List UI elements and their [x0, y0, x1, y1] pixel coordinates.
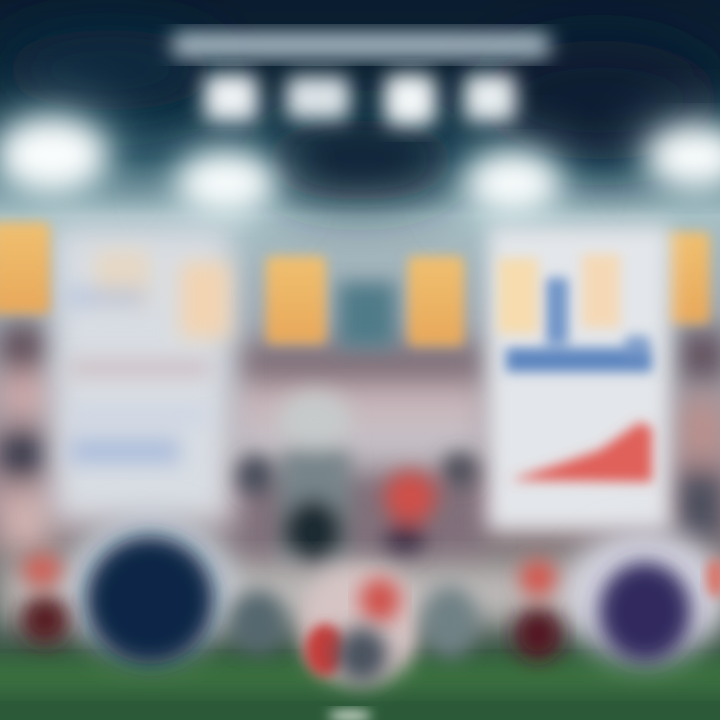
helmet: grey left: [230, 590, 286, 654]
crowd band: [0, 325, 720, 560]
helmet: red and grey centre: [298, 565, 422, 685]
left panel chart: [70, 410, 210, 464]
yard marker: [328, 710, 372, 720]
centre crowd figures: [237, 392, 478, 566]
right panel bars: [498, 254, 652, 372]
helmet: grey right: [422, 586, 478, 658]
helmet: maroon right: [514, 560, 562, 660]
center teal panel: [338, 282, 396, 348]
left panel: [52, 226, 232, 522]
orange blocks: [0, 222, 710, 346]
title icons row: [204, 74, 516, 126]
helmet: navy: [66, 513, 234, 664]
stadium lights: [0, 105, 720, 223]
field: [0, 662, 720, 720]
helmet: left small: [21, 554, 69, 644]
helmet: far right edge: [706, 558, 720, 598]
right panel area chart: [510, 422, 652, 482]
dark canopy: [0, 30, 720, 200]
helmet: purple: [567, 529, 720, 662]
left panel bars: [65, 250, 230, 376]
title: [172, 32, 550, 58]
white sideline band: [0, 565, 720, 625]
right panel: [488, 226, 670, 530]
